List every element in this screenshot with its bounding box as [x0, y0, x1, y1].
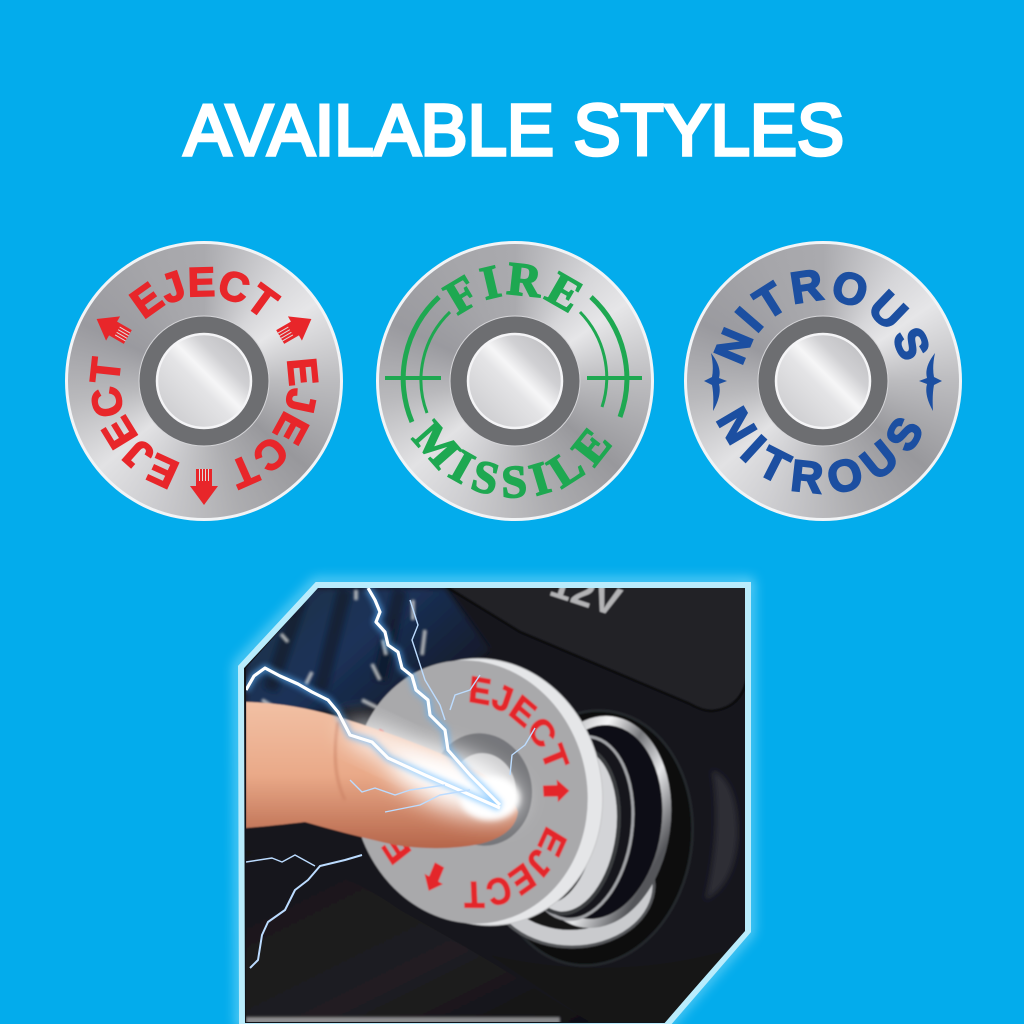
label: eject top: EJECT [128, 266, 282, 320]
dark vent slats [270, 590, 400, 690]
label: nitrous bottom: NITROUS [716, 405, 922, 494]
bolt cores [246, 588, 500, 808]
finger crease [335, 722, 345, 800]
finger [246, 702, 518, 848]
icon: crosshair arcs [385, 297, 642, 422]
panel: fire missile button style [376, 241, 654, 521]
black socket gasket [522, 709, 694, 967]
icon: hub ring [139, 316, 269, 446]
label: eject right: EJECT [234, 358, 319, 490]
button text eject 1: EJECT [468, 675, 570, 766]
icon: swoosh right [919, 353, 942, 411]
right bulge [705, 770, 738, 900]
icon: arrow upper left [90, 307, 135, 349]
button face [360, 660, 588, 924]
button hub [442, 732, 532, 846]
panel: product photo illustration [226, 570, 762, 1024]
label: nitrous top: NITROUS [713, 270, 929, 365]
dark 12V plate [445, 586, 748, 711]
label: 12V: 12V [545, 561, 626, 625]
icon: arrow bottom [190, 469, 218, 505]
thin bolts [246, 600, 535, 968]
silver socket base [507, 880, 657, 950]
panel: eject button style [65, 241, 343, 521]
panel frame [241, 585, 748, 1024]
label: fire: FIRE [441, 262, 583, 316]
lower right shade [586, 1019, 588, 1022]
icon: hub ring [450, 316, 580, 446]
button text eject 2: EJECT [463, 826, 568, 909]
button arrow bottom [424, 862, 444, 892]
bottom fade [246, 1017, 560, 1024]
silver socket ring [562, 714, 673, 929]
button side edge [454, 656, 602, 928]
label: eject left: EJECT [89, 356, 180, 490]
button arrow right [543, 779, 570, 802]
panel frame glow [238, 582, 750, 1024]
vent sparks [262, 590, 425, 708]
button text eject 3: EJECT [378, 728, 412, 866]
title: AVAILABLE STYLES [184, 91, 844, 171]
dashboard left vent [246, 588, 490, 720]
photo content [246, 588, 745, 1022]
spark glow [382, 732, 528, 832]
label: missile: MISSILE [410, 418, 612, 498]
photo background [240, 584, 750, 1024]
lightning bolts [246, 588, 535, 968]
icon: hub ring [758, 316, 888, 446]
icon: arrow upper right [273, 307, 318, 349]
panel: nitrous button style [684, 241, 962, 521]
lower console [247, 940, 588, 1022]
bolt halos [246, 588, 500, 808]
icon: swoosh left [704, 353, 727, 411]
